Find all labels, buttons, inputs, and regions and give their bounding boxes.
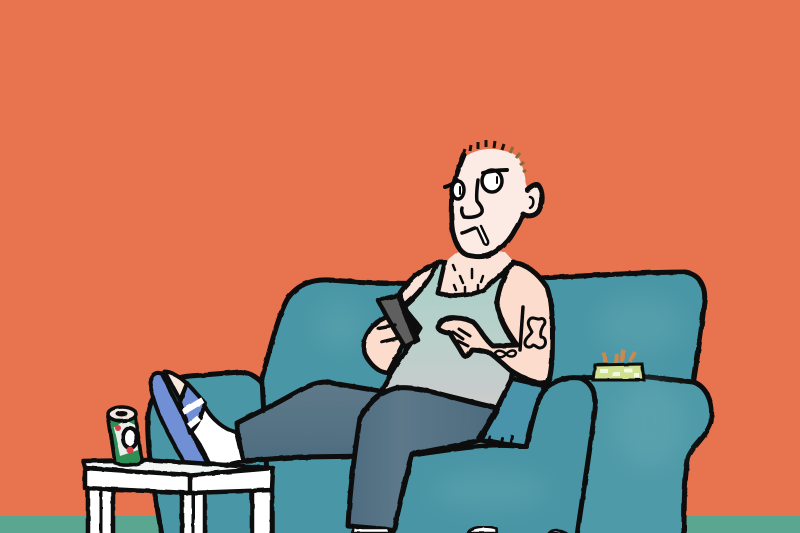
head outline (451, 155, 542, 257)
hand (364, 315, 405, 373)
bone tattoo (525, 318, 545, 348)
far leg (237, 382, 385, 461)
left pupil (459, 187, 461, 194)
soda can (108, 407, 142, 465)
collar line (438, 262, 515, 295)
right eye (482, 170, 502, 192)
foot and slipper (150, 372, 243, 470)
floor (0, 516, 800, 533)
can logo ring (123, 428, 137, 448)
soft sofa highlights (315, 295, 685, 510)
cigarette butts (604, 350, 635, 364)
sofa (148, 272, 712, 533)
left eye (452, 181, 464, 199)
remote side (398, 298, 415, 342)
tray (593, 364, 644, 380)
far arm shoulder (400, 262, 445, 330)
nose (462, 180, 482, 217)
can logo (114, 420, 138, 456)
slipper toe (165, 372, 187, 400)
arm crease (520, 307, 523, 350)
remote and hand (364, 295, 418, 373)
neck and chest (438, 252, 515, 295)
face details (445, 170, 545, 357)
can top (108, 407, 136, 421)
bottom slippers (352, 527, 566, 533)
ear detail (530, 197, 533, 208)
tank top (381, 262, 522, 408)
sofa seat cushion (300, 440, 600, 533)
lashes and brows (445, 170, 507, 187)
sock (190, 405, 243, 468)
strap stripe (183, 400, 203, 426)
near leg (348, 388, 497, 530)
sofa far arm (148, 372, 300, 533)
mouth (462, 228, 475, 233)
slipper strap (180, 383, 205, 433)
table top (83, 460, 270, 476)
tray speckles (600, 370, 639, 375)
chest hair (453, 265, 483, 293)
can body (108, 412, 142, 465)
right pupil (496, 177, 498, 183)
remote (378, 295, 418, 347)
ashtray (593, 350, 644, 380)
tan stubble (510, 147, 526, 172)
near arm (438, 262, 552, 383)
sofa front arm face (392, 378, 595, 533)
head skin (451, 149, 542, 257)
finger lines (378, 325, 398, 342)
cigarette (477, 226, 488, 245)
table legs (88, 488, 272, 533)
slipper sole (150, 373, 208, 470)
sofa back (262, 272, 705, 533)
stitches on cushion (488, 436, 525, 447)
sofa front arm side (575, 376, 712, 533)
hair stubble (463, 140, 526, 172)
can spots (126, 446, 134, 454)
infinity tattoo (495, 350, 516, 357)
fingers (453, 329, 470, 346)
black stubble (463, 140, 504, 155)
table apron (85, 468, 273, 493)
man (237, 149, 552, 461)
sofa shadow patch (480, 378, 545, 447)
table (83, 460, 273, 533)
